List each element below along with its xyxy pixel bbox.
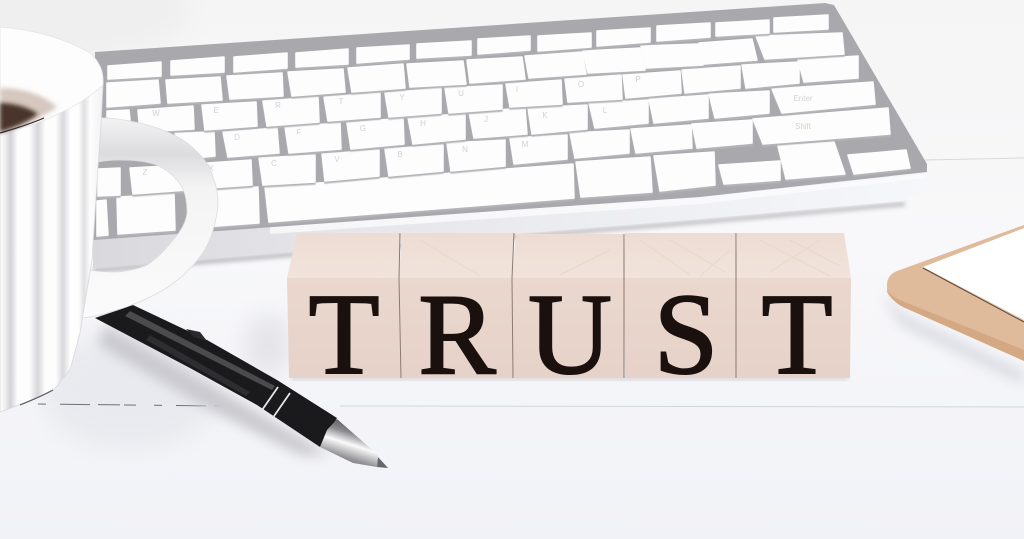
block top grain [420, 240, 840, 276]
clipboard edge [888, 290, 1024, 361]
pen rings [260, 387, 278, 413]
key row 5 [98, 108, 890, 196]
word: TRUST: S [654, 271, 718, 399]
coffee [0, 88, 57, 133]
block seams [399, 233, 736, 378]
shadow: blocks and pen on desk [98, 315, 848, 455]
clipboard board [887, 225, 1024, 361]
pen metal tip [320, 419, 378, 467]
keyboard shadow [93, 202, 905, 273]
key legends: K [542, 111, 548, 120]
key row 4 [175, 82, 875, 159]
key legends: Shift [795, 122, 812, 131]
clipboard shadow [880, 290, 1024, 385]
key legends: Enter [793, 94, 813, 103]
key legends: L [603, 106, 608, 115]
key legends: Y [399, 93, 405, 102]
pen nib [377, 457, 388, 468]
key row 1 [108, 15, 828, 79]
block 4 [624, 233, 736, 378]
coffee mug [0, 27, 218, 412]
key row 6 [97, 142, 910, 236]
keyboard [93, 3, 928, 273]
paper edge [923, 268, 1024, 322]
mug base line [20, 390, 53, 405]
mug rim line [0, 118, 44, 133]
pen clip [186, 329, 207, 341]
key legends: V [334, 155, 340, 164]
block 1 [287, 233, 401, 378]
mug ribbed body [0, 85, 103, 412]
key legends: M [522, 140, 529, 149]
key legends: D [234, 133, 240, 142]
word: TRUST: T [762, 271, 832, 399]
key legends: N [462, 145, 468, 154]
pen highlight [125, 311, 275, 390]
key legends: Z [143, 168, 148, 177]
keyboard front lip [93, 170, 928, 268]
key legends: O [578, 80, 584, 89]
keycaps, bottom row first so that each row's shadow falls on the row below [97, 15, 910, 236]
key legends: T [339, 97, 344, 106]
key legends: C [271, 159, 277, 168]
key legends: F [297, 128, 302, 137]
clipboard with paper [880, 225, 1024, 385]
block 3 [512, 234, 624, 378]
key legends: I [516, 85, 518, 94]
key legends: U [458, 89, 464, 98]
key legends: R [275, 101, 281, 110]
mug handle [82, 118, 218, 318]
word: TRUST: U [528, 271, 612, 399]
key legends: W [152, 109, 160, 118]
key legends: G [360, 124, 366, 133]
pen body [95, 305, 337, 447]
keyboard grey plate [93, 3, 927, 240]
key legends: H [420, 119, 426, 128]
key legends: B [397, 150, 403, 159]
word: TRUST: T [309, 271, 379, 399]
key legends: E [213, 106, 219, 115]
key row 2 [107, 33, 844, 107]
wooden blocks spelling TRUST [287, 233, 851, 399]
key legends: X [208, 164, 214, 173]
keyboard lip highlight [270, 174, 926, 234]
paper sheet [923, 228, 1024, 320]
pen [95, 305, 388, 468]
block 5 [736, 233, 851, 378]
word: TRUST [309, 271, 832, 399]
mug rim and interior [0, 27, 103, 133]
block 2 [399, 233, 514, 378]
key legends: P [635, 75, 641, 84]
key row 3 [107, 56, 858, 132]
key legends [143, 75, 813, 177]
key legends: J [484, 115, 488, 124]
word: TRUST: R [418, 271, 496, 399]
